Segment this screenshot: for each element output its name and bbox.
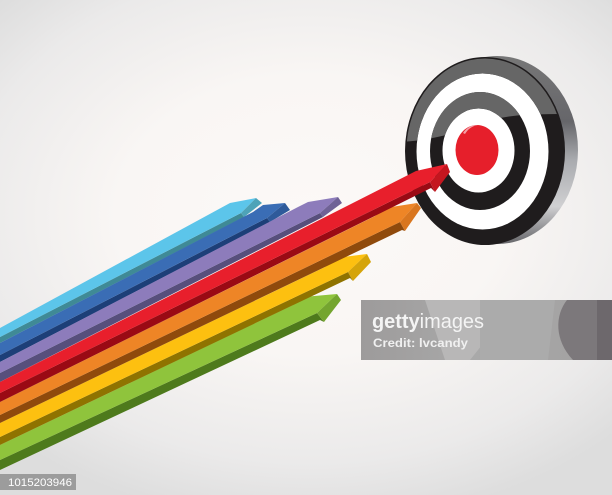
image id number: 1015203946 [8,477,72,489]
arrow: green [0,294,341,470]
target outer white ring [416,74,548,230]
arrow: cyan [0,198,262,343]
target gloss on outer ring [407,58,557,142]
target rim [416,56,578,244]
arrow: purple [0,197,342,382]
image id tag [0,474,76,490]
watermark logo: gettyimages [372,311,484,333]
target inner black ring [430,92,530,210]
target inner white ring [442,108,514,192]
bullseye highlight [463,125,478,134]
target bullseye [456,125,498,175]
watermark panel [361,300,612,360]
target outer black ring [405,57,565,245]
watermark credit: Credit: lvcandy [373,336,468,350]
watermark texture [425,300,612,360]
arrow: yellow [0,254,371,445]
arrow: blue [0,203,290,362]
target [405,56,578,245]
arrow: orange [0,203,421,423]
arrow: red [0,164,450,402]
